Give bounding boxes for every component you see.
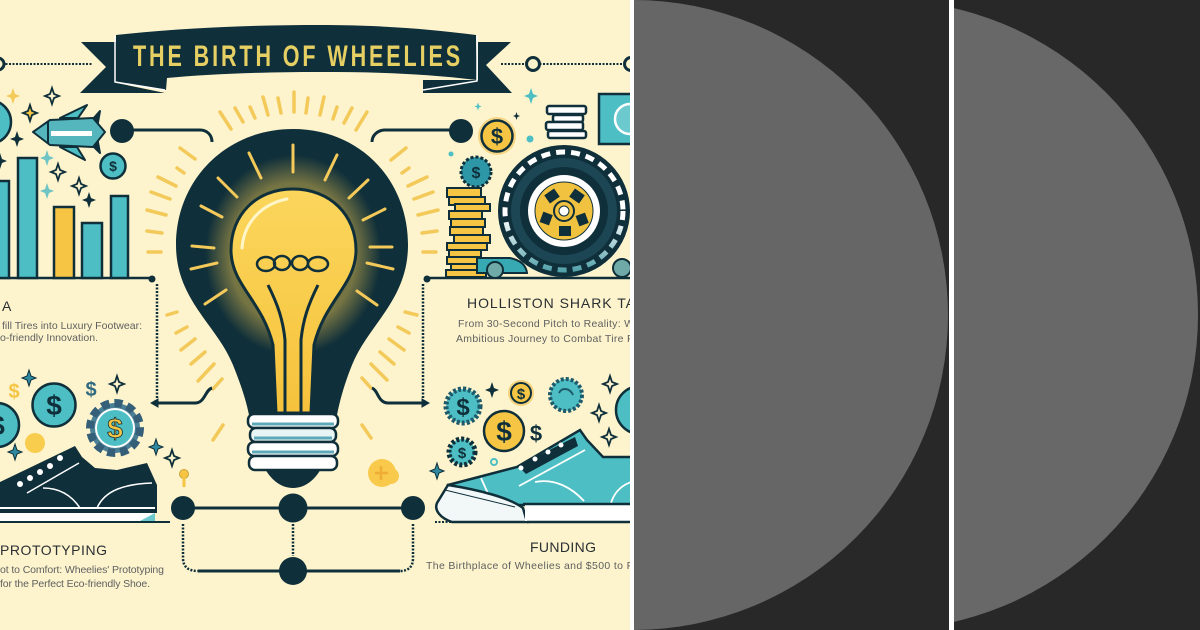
icon: funding coins: $ [496,416,512,447]
icon: funding coins: $ [517,386,526,403]
icon: silver coin stack [546,106,586,138]
icon: yellow small coins: $ [85,379,97,401]
sparkles: top right [448,88,538,156]
bulb inner rays [191,145,393,305]
icon: gear with dollar: $ [107,413,123,444]
bulb highlight [242,199,287,248]
section: shark tank text: Ambitious Journey to Combat Tire P [456,333,634,345]
icon: large teal coin cropped [0,100,11,144]
icon: wheel [498,145,630,277]
filament [257,256,328,271]
icon: funding coins: $ [456,394,470,421]
sparkles: bottom left [8,370,179,466]
icon: yellow dollar coin [478,117,516,155]
section: funding text: FUNDING [530,539,596,555]
icon: teal gear coin [461,157,491,187]
section: shark tank text [456,298,630,344]
icon: teal coin large [32,384,76,426]
icon: coin stack [446,188,490,277]
outer light rays [147,92,438,440]
connector: top right [372,119,473,143]
icon: teal coin cropped bottom left [0,403,19,447]
section: prototyping text: for the Perfect Eco-friendly Shoe. [0,578,150,590]
section: idea text: fill Tires into Luxury Footwear: [2,320,142,332]
connector: middle left [0,276,212,407]
top dotted connectors [0,58,638,70]
icon: funding coins [446,379,664,465]
icon: yellow dollar coin: $ [491,124,503,149]
title text: THE BIRTH OF WHEELIES [133,40,463,73]
bulb base bottom [266,471,320,488]
section: shark tank text: From 30-Second Pitch to Reality: W [458,318,634,330]
icon: rocket [33,105,105,160]
section: idea text [0,302,142,343]
icon: teal gear coin: $ [472,165,481,182]
connector: bottom network [171,494,425,585]
bulb screw threads [248,414,338,470]
section: funding text [426,539,633,572]
infographic crop [0,25,664,590]
section: idea text: A [2,298,12,314]
icon: yellow small coins: $ [8,381,20,403]
background: left panel [0,0,630,630]
icon: teal coin large: $ [46,390,62,421]
icon: small dollar coin: $ [109,158,117,174]
sparkles: top left [0,88,96,208]
section: prototyping text: PROTOTYPING [0,542,107,558]
filament stems [268,285,318,412]
icon: black shoe [0,446,170,522]
icon: gold coin blob [368,459,399,487]
connector: top left [110,119,212,143]
bulb glass [231,189,356,413]
icon: funding coins: $ [458,445,467,462]
section: idea text: o-friendly Innovation. [0,332,98,344]
title banner [80,25,512,93]
connector: middle right [372,276,630,407]
dark panel: right [954,0,1200,630]
bar chart [0,158,128,278]
section: funding text: The Birthplace of Wheelies and $500 to F [426,560,633,572]
icon: yellow small coins [8,379,97,453]
icon: teal shoe [435,430,640,522]
icon: funding coins: $ [530,421,542,446]
bulb dark silhouette [176,129,408,415]
section: prototyping text: ot to Comfort: Wheelies' Prototyping [0,564,164,576]
section: prototyping text [0,542,164,590]
icon: banknote [598,92,630,146]
sparkles: bottom right [430,376,617,479]
section: shark tank text: HOLLISTON SHARK TA [467,295,636,311]
icon: small dollar coin [100,154,126,178]
light bulb [176,129,408,488]
icon: small teal car [477,258,631,278]
bulb glow [205,155,381,355]
icon: gear with dollar [90,403,140,453]
dark panel: middle [634,0,949,630]
icon: small key [180,470,188,487]
